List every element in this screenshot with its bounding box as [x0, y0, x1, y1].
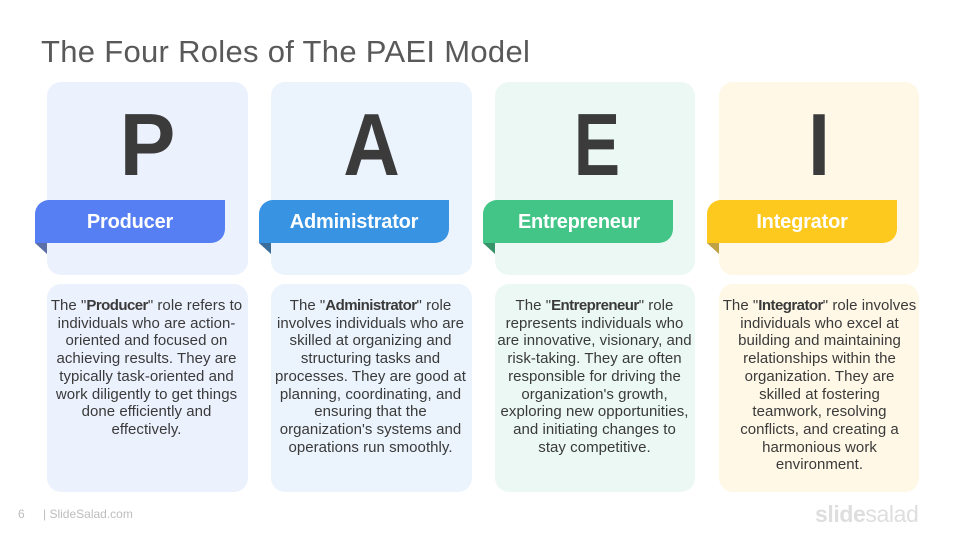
text: Administrator description: planning, coordinating, and — [280, 386, 461, 403]
text: Integrator description: individuals who excel at — [740, 315, 899, 332]
text: Producer description: effectively. — [112, 421, 181, 438]
text: Administrator description: processes. They are good at — [275, 368, 466, 385]
text: Producer description: done efficiently and — [82, 403, 211, 420]
footer source: | SlideSalad.com — [43, 507, 133, 521]
text: Entrepreneur description: are innovative, visionary, and — [497, 332, 692, 349]
upper card — [495, 82, 695, 275]
text: Entrepreneur description: and initiating changes to — [513, 421, 676, 438]
panel: E Entrepreneur — [495, 82, 695, 492]
label: Entrepreneur: Entrepreneur — [518, 211, 640, 233]
text: Producer description: typically task-oriented and — [59, 368, 234, 385]
page number: 6 — [18, 507, 25, 521]
text: Integrator description: The "Integrator" role involves — [723, 297, 916, 314]
text: Entrepreneur description: The "Entrepreneur" role — [516, 297, 673, 314]
text: Entrepreneur description: organization's growth, — [521, 386, 668, 403]
text: Integrator description: environment. — [776, 456, 863, 473]
text: Producer description — [51, 297, 242, 438]
lower card — [271, 284, 472, 492]
text: Administrator description: structuring tasks and — [301, 350, 440, 367]
text: Administrator description: ensuring that the — [314, 403, 427, 420]
label: Producer: Producer — [87, 211, 173, 233]
text: Integrator description: harmonious work — [762, 439, 877, 456]
text: Producer description: work diligently to get things — [56, 386, 237, 403]
text: Entrepreneur description: represents individuals who — [506, 315, 683, 332]
text: Producer description: achieving results. They are — [56, 350, 237, 367]
text: Integrator description: skilled at fostering — [759, 386, 880, 403]
text: Producer description: oriented and focused on — [66, 332, 227, 349]
letter E: E — [574, 94, 620, 194]
text: Integrator description: relationships within the — [743, 350, 896, 367]
text: Integrator description: conflicts, and creating a — [740, 421, 899, 438]
upper card — [719, 82, 919, 275]
upper card — [271, 82, 472, 275]
text: Entrepreneur description: risk-taking. They are often — [507, 350, 682, 367]
lower card — [719, 284, 919, 492]
panel: P Producer — [47, 82, 248, 492]
text: Producer description: The "Producer" role refers to — [51, 297, 242, 314]
lower card — [47, 284, 248, 492]
letter A: A — [343, 94, 400, 194]
ribbon: Entrepreneur — [483, 200, 673, 254]
text: Integrator description — [723, 297, 916, 473]
ribbon: Administrator — [259, 200, 449, 254]
text: Entrepreneur description: stay competitive. — [538, 439, 651, 456]
text: Integrator description: building and maintaining — [738, 332, 901, 349]
text: Entrepreneur description: responsible for driving the — [508, 368, 681, 385]
text: Administrator description: organization's systems and — [280, 421, 461, 438]
text: Administrator description — [275, 297, 466, 456]
lower card — [495, 284, 695, 492]
text: Entrepreneur description: exploring new opportunities, — [501, 403, 688, 420]
ribbon: Producer — [35, 200, 225, 254]
text: Integrator description: teamwork, resolving — [752, 403, 887, 420]
logo: slidesalad: slidesalad — [815, 501, 918, 527]
ribbon: Integrator — [707, 200, 897, 254]
text: Administrator description: operations run smoothly. — [288, 439, 453, 456]
text: Administrator description: The "Administrator" role — [290, 297, 451, 314]
panel: A Administrator — [271, 82, 472, 492]
letter P: P — [120, 94, 175, 194]
label: Administrator: Administrator — [290, 211, 418, 233]
title: The Four Roles of The PAEI Model — [41, 34, 530, 69]
panel: I Integrator — [719, 82, 919, 492]
upper card — [47, 82, 248, 275]
text: Administrator description: skilled at organizing and — [290, 332, 451, 349]
text: Administrator description: involves individuals who are — [277, 315, 464, 332]
label: Integrator: Integrator — [756, 211, 848, 233]
text: Integrator description: organization. They are — [745, 368, 894, 385]
letter I: I — [808, 94, 830, 194]
text: Producer description: individuals who are action- — [58, 315, 235, 332]
text: Entrepreneur description — [497, 297, 692, 456]
